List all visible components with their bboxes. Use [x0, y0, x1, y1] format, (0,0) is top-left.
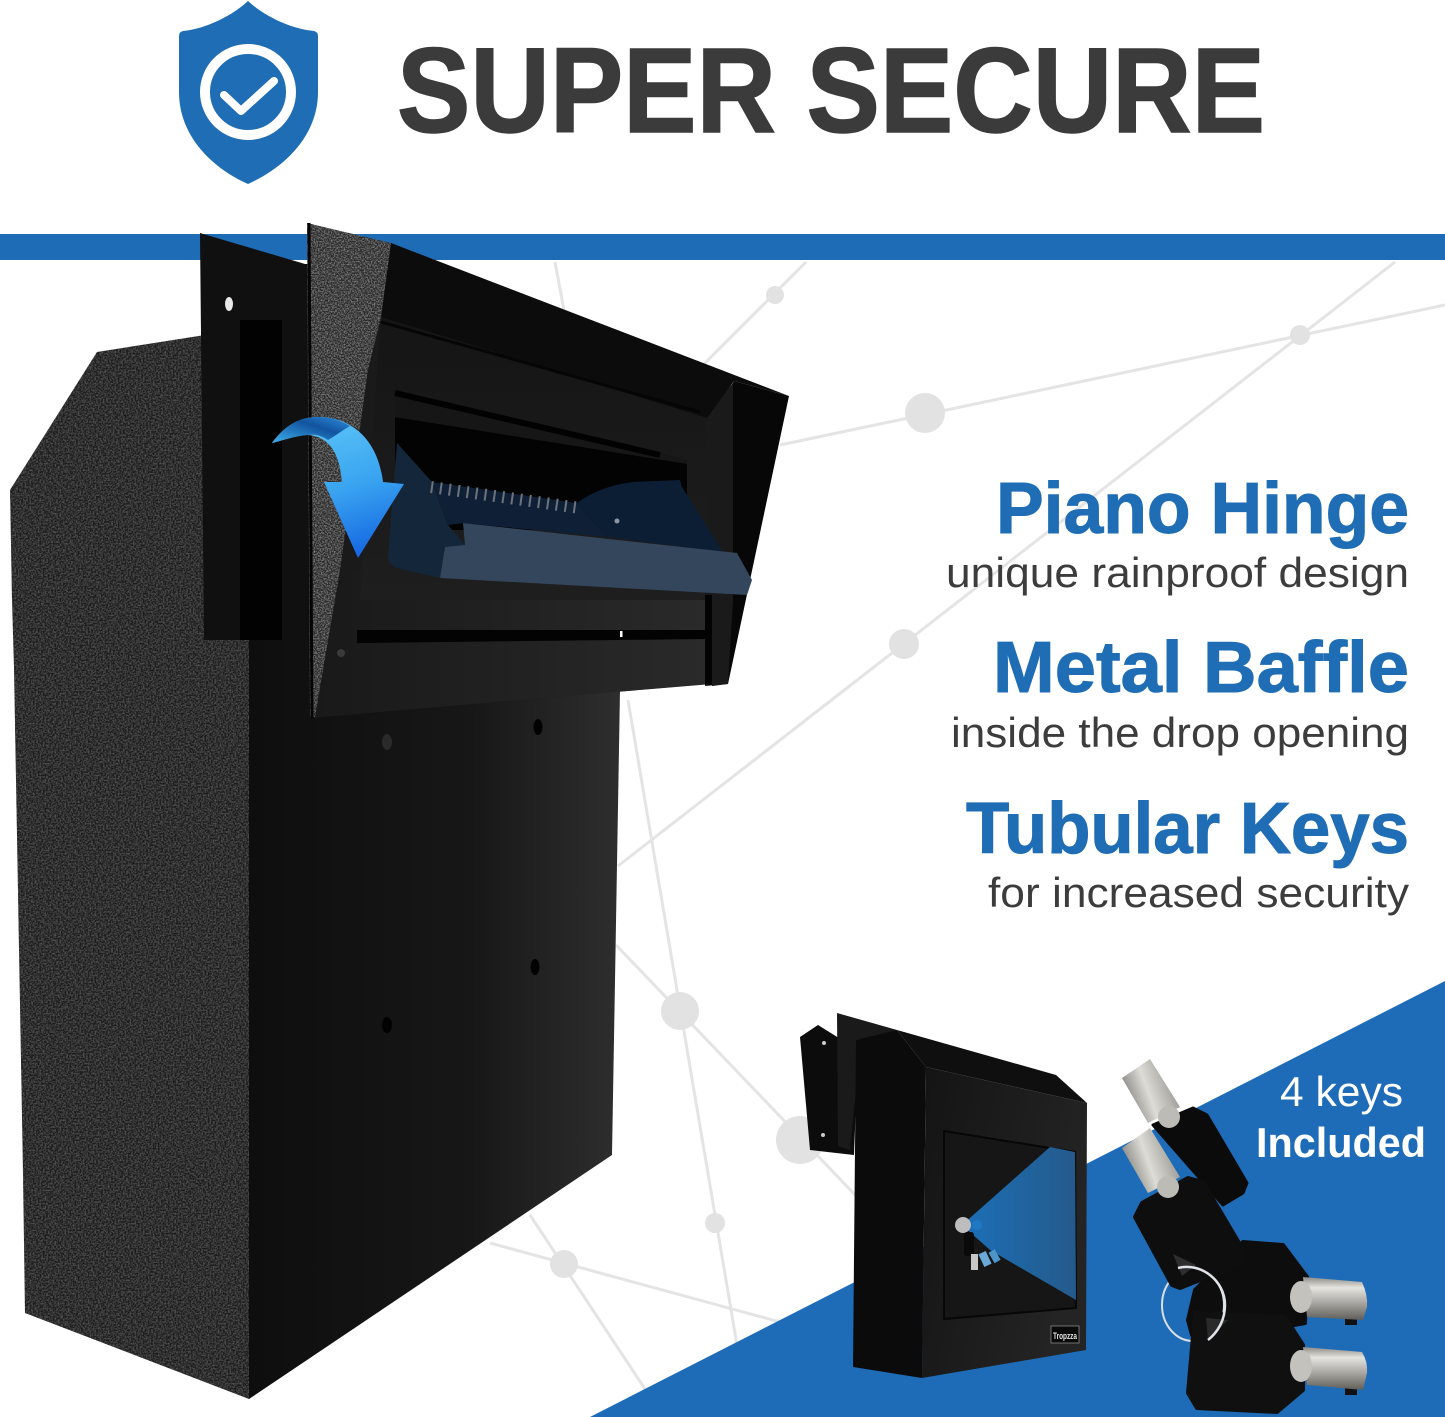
- feature: Metal Baffle: [951, 628, 1409, 756]
- door: [944, 1131, 1076, 1319]
- network line pattern: [490, 262, 1445, 1392]
- inserted key: [964, 1220, 1001, 1270]
- feature: Piano Hinge: unique rainproof design: [946, 549, 1409, 596]
- front lower plate: [315, 570, 712, 717]
- light beam: [962, 1147, 1076, 1300]
- product: small box with locked door: [800, 1013, 1087, 1378]
- flap rivet: [614, 518, 620, 524]
- brand badge: Tropzza: [1053, 1331, 1078, 1341]
- icon: security shield with check: [179, 1, 318, 184]
- flap right fin: [577, 480, 723, 552]
- mounting holes: [382, 719, 542, 1033]
- feature: Piano Hinge: [946, 469, 1409, 596]
- title: SUPER SECURE: [397, 22, 1265, 158]
- screw left: [337, 649, 345, 657]
- rear bracket: [800, 1025, 858, 1155]
- rear plate: [837, 1013, 897, 1150]
- flange inner channel: [240, 320, 282, 640]
- product: large drop box: [10, 223, 789, 1399]
- key ring back arc: [1162, 1269, 1224, 1341]
- vertical rail beside wing: [705, 383, 733, 686]
- hood backdrop: [312, 243, 708, 718]
- hood ridge highlight: [381, 322, 700, 412]
- blue corner triangle: [590, 981, 1445, 1417]
- rail shadow: [705, 595, 712, 685]
- feature: Metal Baffle: inside the drop opening: [951, 709, 1409, 756]
- box front face: [249, 640, 620, 1399]
- brand badge: [1051, 1326, 1079, 1343]
- arrow: flap opening direction: [272, 417, 404, 558]
- back flange: [200, 233, 312, 640]
- key 2: [1122, 1128, 1245, 1288]
- key 4: [1188, 1313, 1367, 1412]
- key 3: [1188, 1242, 1367, 1335]
- feature: Tubular Keys: [966, 789, 1409, 916]
- hood mid panel: [360, 317, 707, 600]
- feature: Piano Hinge: Piano Hinge: [996, 469, 1409, 549]
- flange hole: [225, 297, 233, 311]
- hood top slope: [381, 243, 789, 418]
- feature: Tubular Keys: Tubular Keys: [966, 789, 1409, 869]
- feature: Metal Baffle: Metal Baffle: [993, 628, 1409, 708]
- box side face: [853, 1030, 926, 1378]
- hood right wing: [712, 381, 789, 686]
- flap inner tray: [432, 482, 607, 537]
- blue horizontal band: [0, 234, 1445, 260]
- slot glint: [620, 631, 622, 637]
- bracket holes: [822, 1041, 826, 1045]
- callout: 4 keys included: [1256, 1068, 1426, 1166]
- box side face: [10, 335, 249, 1399]
- opening upper strip: [395, 390, 687, 464]
- callout: 4 keys included: Included: [1256, 1119, 1426, 1166]
- lower slot: [357, 630, 707, 643]
- key 1: [1122, 1059, 1247, 1205]
- flap side wall: [388, 443, 465, 578]
- drop opening: [395, 417, 687, 530]
- flap front lip: [440, 523, 752, 595]
- lock cylinder: [955, 1217, 971, 1233]
- flange left edge: [309, 223, 312, 718]
- key ring front arc: [1178, 1267, 1225, 1340]
- opening dark line: [395, 393, 660, 455]
- feature: Tubular Keys: for increased security: [988, 869, 1409, 916]
- box front face: [922, 1067, 1087, 1378]
- box top slope: [897, 1030, 1087, 1103]
- keys: four tubular keys on a ring: [1122, 1059, 1367, 1412]
- textured front flange: [307, 223, 391, 717]
- callout: 4 keys included: 4 keys: [1280, 1068, 1403, 1115]
- flap teeth: [431, 487, 580, 508]
